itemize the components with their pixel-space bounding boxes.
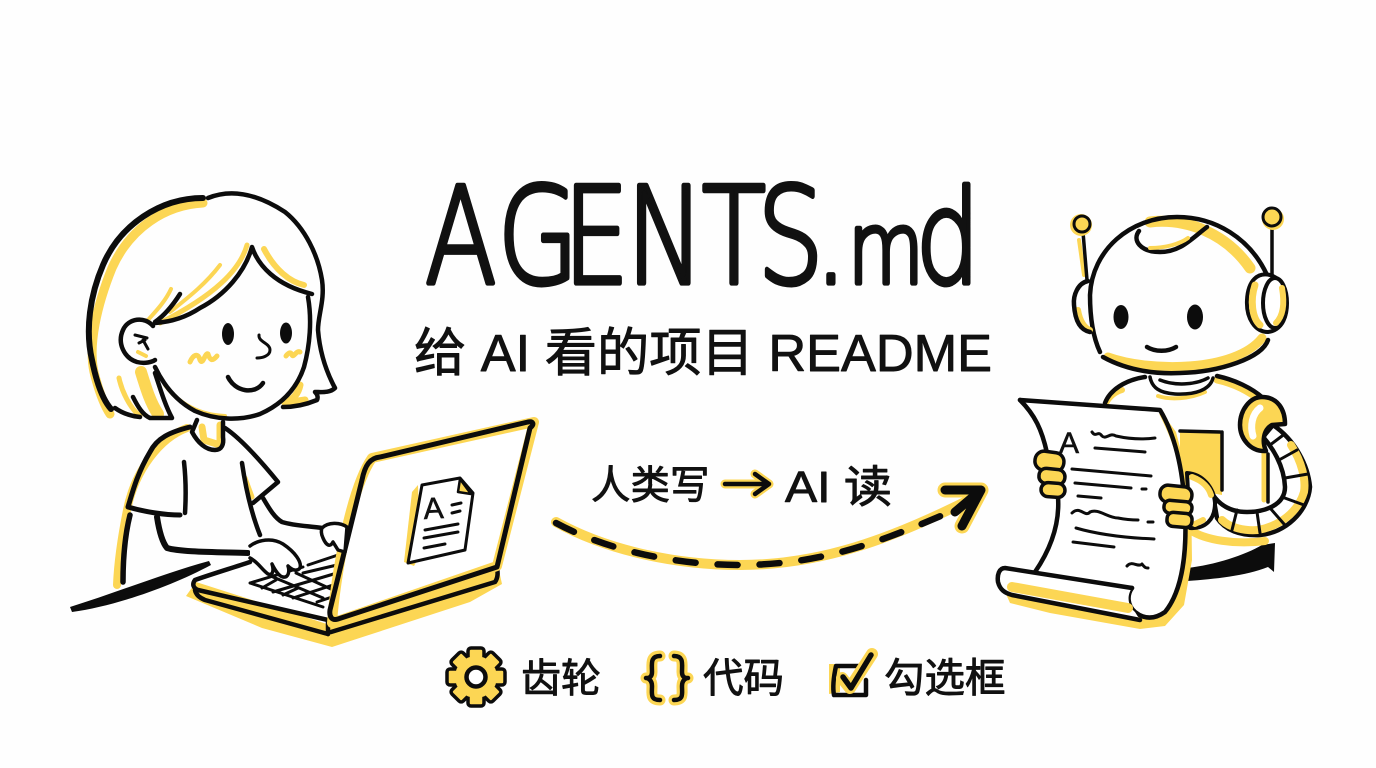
hands [250, 523, 347, 577]
face [121, 297, 310, 419]
right hand [1159, 473, 1215, 528]
laptop screen [332, 422, 534, 623]
label: human writes, AI reads [591, 463, 892, 512]
left hand [1034, 450, 1066, 498]
shoulder joint [1240, 397, 1285, 451]
icon: checkbox [829, 654, 872, 695]
left ear [1078, 310, 1090, 330]
illustration: robot reading scroll [998, 208, 1310, 629]
shirt and arms [70, 420, 322, 612]
cheeks [190, 354, 217, 362]
scroll text [1059, 427, 1155, 568]
dashed arrow from human to AI [556, 490, 981, 565]
scroll paper [998, 400, 1215, 629]
small arrow [725, 474, 769, 494]
robot head [1070, 208, 1287, 373]
smile [228, 377, 263, 390]
chair back [123, 515, 130, 582]
shadow of scroll [1002, 410, 1192, 629]
skull [1150, 221, 1250, 268]
scroll roll [998, 568, 1140, 620]
label: code: 代码 [703, 655, 784, 701]
ear [121, 320, 155, 363]
icon: gear [447, 648, 505, 706]
robot body [1105, 376, 1310, 542]
laptop [186, 422, 534, 647]
document icon: A [423, 492, 444, 526]
subtitle: 给 AI 看的项目 README [414, 325, 992, 383]
eyes [1114, 305, 1128, 329]
text: human writes: 人类写 [591, 464, 710, 508]
title: AGENTS. [425, 159, 848, 315]
right headphone [1247, 274, 1287, 332]
hair [89, 193, 335, 418]
mouth [1147, 347, 1176, 351]
document icon [404, 478, 473, 566]
text: AI reads: AI 读 [785, 463, 892, 512]
neck [1158, 392, 1205, 398]
title: m [848, 192, 924, 308]
desk line [70, 561, 211, 612]
robot arm [1213, 397, 1310, 535]
robot base [1187, 543, 1275, 581]
scroll text: A [1059, 427, 1079, 460]
legend row [447, 648, 1006, 706]
label: gear: 齿轮 [521, 657, 601, 701]
nose [257, 335, 270, 358]
title: d [916, 164, 980, 314]
keyboard [250, 555, 338, 607]
illustration: woman with laptop [70, 193, 534, 647]
antennas [1070, 208, 1284, 280]
icon: braces [646, 656, 688, 700]
eyes [222, 323, 234, 345]
label: checkbox: 勾选框 [884, 655, 1006, 701]
